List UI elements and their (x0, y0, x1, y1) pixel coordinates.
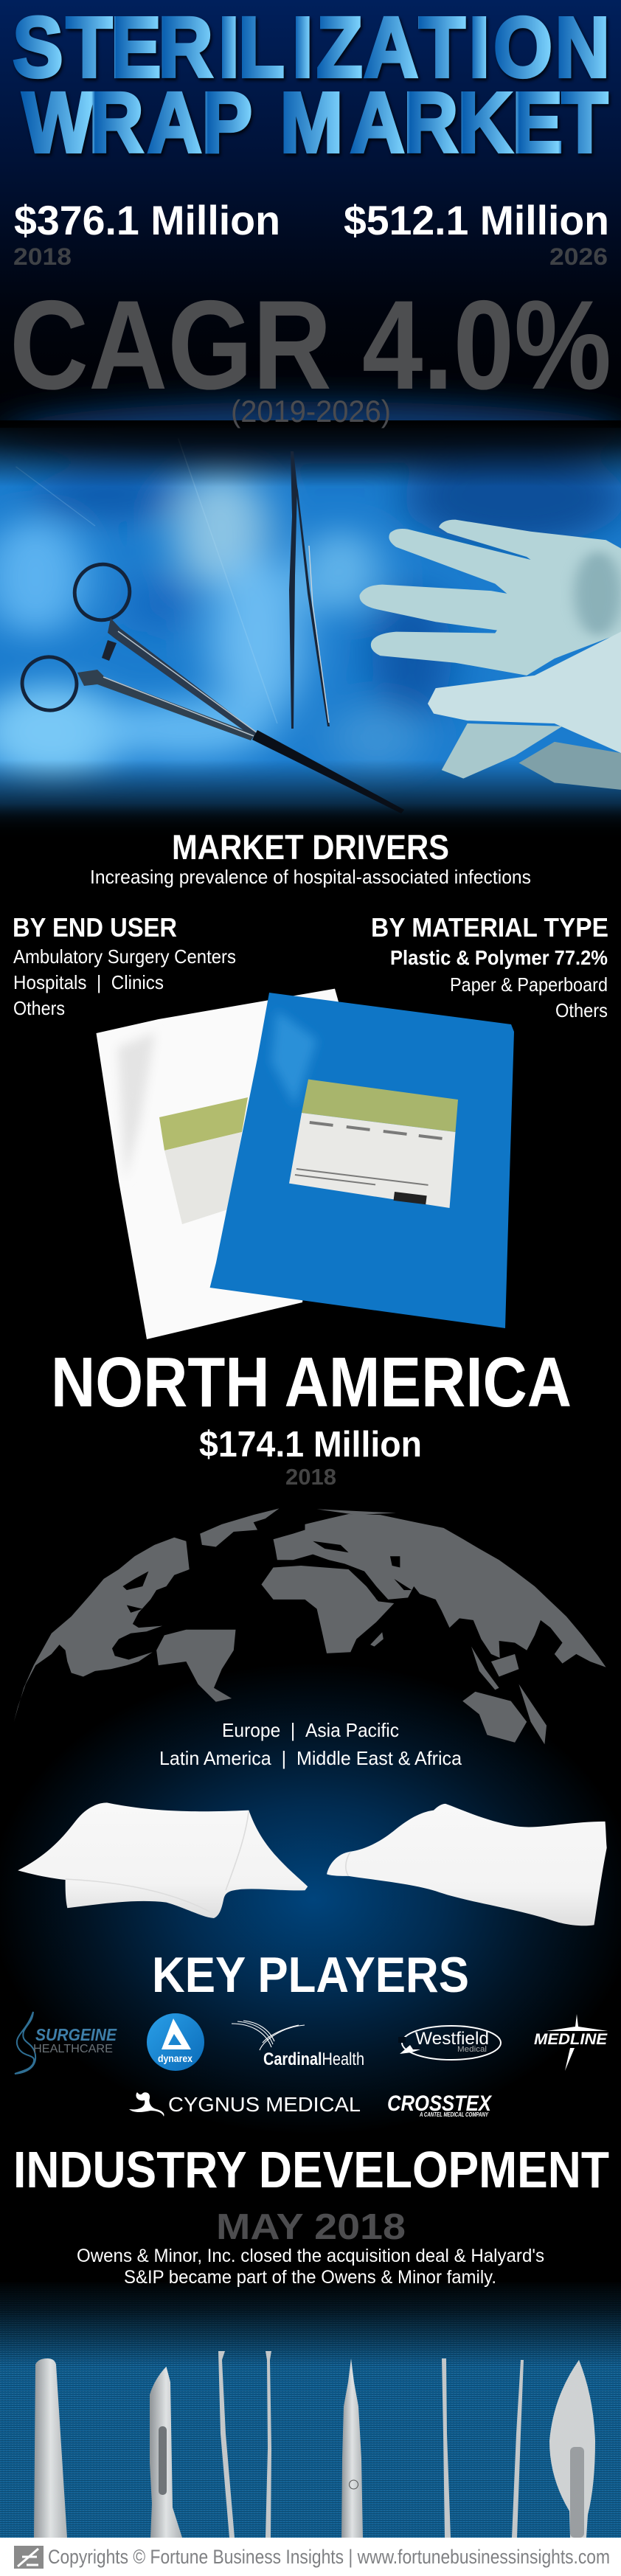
logo: Dynarex: dynarex (158, 2052, 192, 2064)
heading: key players: KEY PLAYERS (152, 1947, 469, 2003)
logo: Surgeine Healthcare: HEALTHCARE (33, 2043, 113, 2055)
stat: 2026 market size: $512.1 Million (344, 197, 609, 243)
stat: north america value (199, 1425, 422, 1490)
logo: Surgeine Healthcare (15, 2012, 117, 2074)
logo: Crosstex: CROSSTEX (387, 2091, 493, 2116)
title: STERILIZATION (13, 0, 610, 95)
footer logo (14, 2546, 44, 2569)
tweezers (289, 451, 330, 729)
stat: north america value: 2018 (285, 1464, 336, 1490)
development description (77, 2246, 544, 2288)
footer bar (0, 2538, 621, 2576)
folded sterile cloth, right (327, 1804, 607, 1926)
logo: Medline (534, 2014, 608, 2071)
logo: Surgeine Healthcare: SURGEINE (35, 2025, 117, 2044)
segment: by material type: Paper & Paperboard (450, 973, 608, 996)
world map globe (14, 1508, 606, 1744)
forceps (15, 555, 404, 813)
logo: Cygnus Medical: CYGNUS MEDICAL (168, 2093, 361, 2116)
title: WRAP MARKET (22, 75, 608, 170)
stat: 2018 market size: 2018 (13, 243, 72, 270)
logo: Cardinal Health (232, 2021, 364, 2069)
segment: by material type (371, 912, 608, 1021)
logo: Medline: MEDLINE (534, 2031, 608, 2048)
instrument: scissors (341, 2358, 363, 2538)
instrument: curved blade (549, 2360, 595, 2538)
white wrap pack (96, 989, 339, 1339)
segment: by material type: Others (555, 999, 608, 1021)
segment: by end user: Others (13, 997, 65, 1019)
instrument: tweezers (218, 2351, 271, 2538)
stat: 2018 market size (13, 197, 280, 270)
segment: by material type: BY MATERIAL TYPE (371, 912, 608, 942)
logo: Cardinal Health: CardinalHealth (263, 2049, 364, 2069)
blue wrap pack (210, 993, 514, 1328)
logo: Westfield Medical: Westfield (415, 2029, 489, 2049)
heading: market drivers (90, 827, 531, 888)
segment: by end user: Hospitals | Clinics (13, 971, 164, 993)
stat: 2026 market size (344, 197, 609, 270)
stat: 2026 market size: 2026 (549, 243, 608, 270)
other regions (159, 1719, 462, 1769)
title (13, 0, 610, 170)
drape highlights and shadows (0, 402, 621, 780)
heading: market drivers: Increasing prevalence of hospital-associated infections (90, 866, 531, 888)
logo: Dynarex (147, 2013, 204, 2071)
development description: Owens & Minor, Inc. closed the acquisition deal & Halyard's (77, 2246, 544, 2266)
gloves (359, 520, 621, 790)
segment: by end user: Ambulatory Surgery Centers (13, 945, 236, 968)
development date: MAY 2018 (216, 2207, 406, 2247)
segment: by end user (13, 912, 236, 1019)
logo: Crosstex: A CANTEL MEDICAL COMPANY (419, 2111, 489, 2118)
logo: Westfield Medical: Medical (457, 2045, 487, 2054)
development description: S&IP became part of the Owens & Minor family. (124, 2267, 496, 2288)
surgical instruments photo (0, 2279, 621, 2538)
other regions: Europe | Asia Pacific (222, 1719, 399, 1741)
instrument: scalpel handle (34, 2358, 67, 2538)
folded sterile cloth, left (18, 1802, 308, 1918)
instrument: scalpel blade (150, 2367, 182, 2538)
heading: market drivers: MARKET DRIVERS (172, 827, 449, 867)
stat: 2018 market size: $376.1 Million (14, 197, 280, 243)
surgical drape photo with forceps, tweezers and gloves (0, 402, 621, 842)
other regions: Latin America | Middle East & Africa (159, 1747, 462, 1769)
segment: by end user: BY END USER (13, 912, 177, 942)
CAGR figure: (2019-2026) (231, 394, 391, 428)
stat: north america value: $174.1 Million (199, 1425, 422, 1465)
instrument: serrated forceps (442, 2358, 524, 2538)
logo: Westfield Medical (398, 2026, 501, 2060)
